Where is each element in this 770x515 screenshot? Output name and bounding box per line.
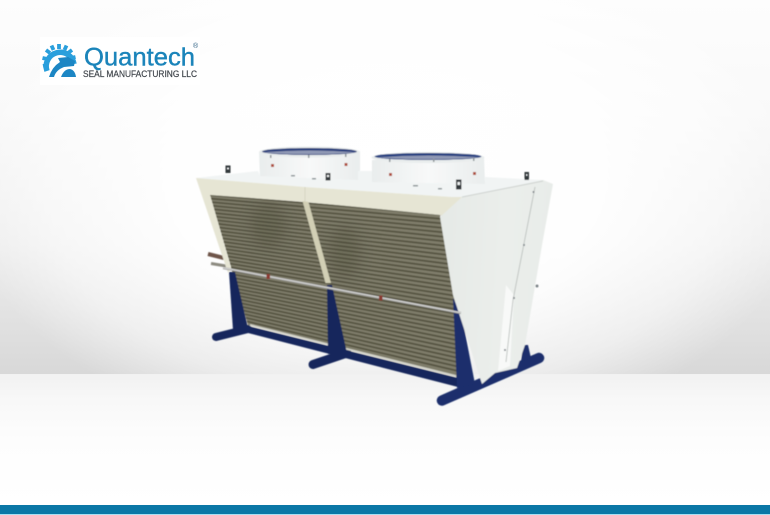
band seam (304, 187, 306, 202)
frame: rear leg stub (521, 345, 531, 362)
lifting lugs (226, 166, 529, 190)
fan shroud bolts and marks (271, 163, 476, 176)
fan shroud: right (372, 152, 485, 186)
logo (40, 37, 200, 85)
horizontal tie rod (223, 268, 461, 313)
registered mark: ® (193, 42, 199, 50)
frame: bottom beam (248, 326, 458, 387)
frame: middle leg (327, 285, 347, 354)
frame: left leg (229, 272, 248, 330)
coil bottom rail (250, 325, 456, 376)
frame: middle foot (313, 353, 347, 364)
pipes: left connection stubs (208, 254, 226, 266)
side panel top edge (462, 181, 543, 197)
frame: left foot (216, 329, 248, 337)
condenser coil (210, 195, 464, 377)
brand name: Quantech (84, 44, 195, 72)
background: studio floor (0, 374, 770, 505)
top deck (196, 171, 543, 198)
icon: gear logo mark (42, 44, 76, 77)
footer bar (0, 505, 770, 515)
dry cooler unit (196, 146, 553, 400)
side panel (440, 180, 553, 384)
background: studio wall (0, 0, 770, 374)
frame: right foot (442, 358, 539, 400)
coil centre divider (302, 201, 331, 283)
frame: right leg (453, 298, 475, 388)
side panel fold line (506, 187, 535, 362)
front cream band (196, 178, 462, 273)
fan shroud: left (259, 146, 360, 182)
side panel fittings (504, 191, 538, 351)
coil fan shadows (250, 201, 361, 278)
tagline: SEAL MANUFACTURING LLC (83, 69, 198, 79)
side panel highlight (498, 285, 514, 371)
